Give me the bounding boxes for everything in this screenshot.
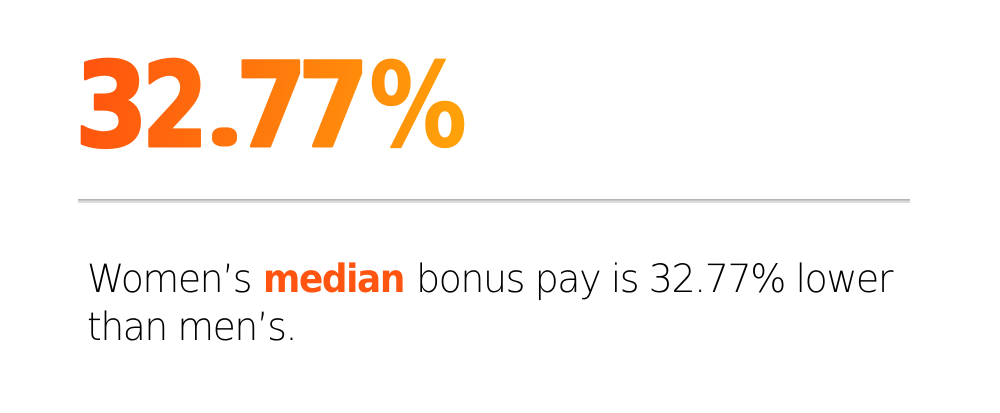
line 2: than men’s. [87, 305, 296, 350]
headline number: 32.77%: 3 [75, 37, 148, 174]
divider [78, 199, 910, 203]
headline number: 32.77%: 7 [298, 37, 369, 174]
headline number: 32.77%: % [369, 37, 467, 174]
headline number: 32.77%: 7 [236, 37, 307, 174]
headline number: 32.77% [75, 37, 467, 174]
line 1 start: Women’s [87, 257, 251, 302]
headline number: 32.77%: . [219, 120, 230, 145]
headline number: 32.77%: 2 [142, 37, 208, 174]
description text [87, 257, 893, 350]
highlighted word: median: median [263, 257, 404, 302]
line 1 end: bonus pay is 32.77% lower [416, 257, 893, 302]
